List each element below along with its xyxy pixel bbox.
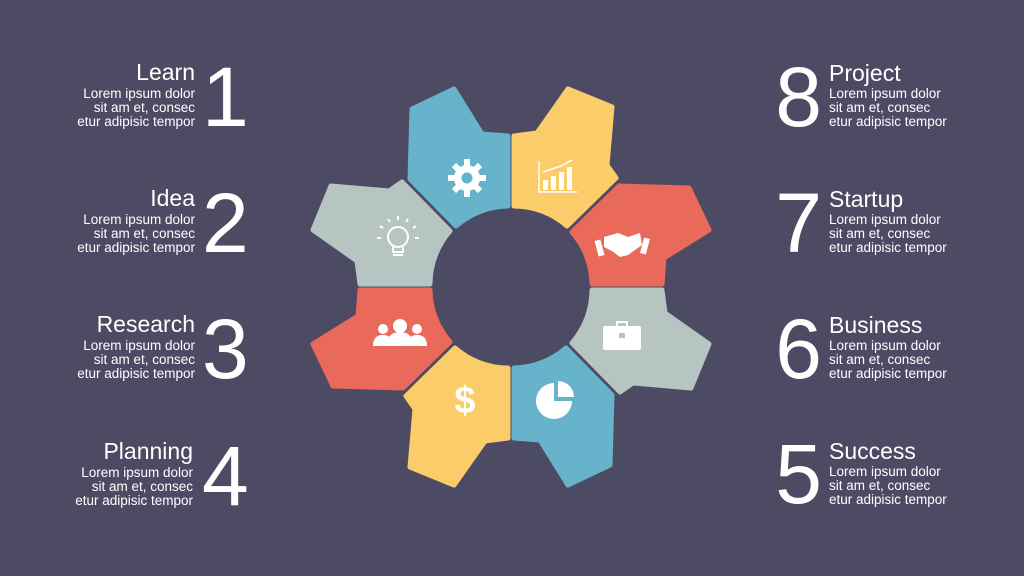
right item 5: Success: Lorem ipsum dolor (829, 464, 941, 479)
icon: light bulb (377, 216, 419, 255)
left item 1: Learn (77, 50, 249, 144)
left item 3: Research (77, 302, 249, 396)
right item 6: Business: Business (829, 312, 922, 338)
left item 3: Research: Research (97, 311, 195, 337)
icon: pie chart (536, 381, 574, 419)
left item 1: Learn: Learn (136, 59, 195, 85)
segment: planning (yellow, dollar) (406, 348, 508, 485)
left item 2: Idea: etur adipisic tempor (77, 240, 195, 255)
right item 7: Startup: etur adipisic tempor (829, 240, 947, 255)
left item 3: Research: sit am et, consec (94, 352, 195, 367)
right item 7: Startup (775, 176, 947, 270)
icon: handshake (595, 233, 650, 257)
right item 6: Business: etur adipisic tempor (829, 366, 947, 381)
segment: startup (red, handshake) (572, 186, 709, 284)
right item 6: Business: Lorem ipsum dolor (829, 338, 941, 353)
left item 1: Learn: etur adipisic tempor (77, 114, 195, 129)
icon: gear (448, 159, 486, 197)
left item 2: Idea: sit am et, consec (94, 226, 195, 241)
right item 8: Project: sit am et, consec (829, 100, 931, 115)
left item 4: Planning: 4 (202, 429, 249, 523)
icon: briefcase (603, 321, 641, 350)
left item 4: Planning: Planning (103, 438, 193, 464)
left item 1: Learn: sit am et, consec (94, 100, 195, 115)
right item 7: Startup: sit am et, consec (829, 226, 931, 241)
segment: success (blue, pie) (514, 348, 612, 485)
cycle diagram (313, 89, 709, 485)
right item 6: Business: 6 (775, 302, 822, 396)
left item 1: Learn: 1 (202, 50, 249, 144)
left item 4: Planning: sit am et, consec (92, 479, 193, 494)
icon: bar chart (539, 160, 577, 192)
segment: business (gray, briefcase) (572, 290, 709, 392)
left item 4: Planning: Lorem ipsum dolor (81, 465, 194, 480)
right item 7: Startup: 7 (775, 176, 822, 270)
icon: dollar: $ (454, 380, 476, 422)
left item 3: Research: Lorem ipsum dolor (83, 338, 196, 353)
right item 8: Project: Lorem ipsum dolor (829, 86, 941, 101)
left item 4: Planning (75, 429, 249, 523)
left item 3: Research: etur adipisic tempor (77, 366, 195, 381)
left item 2: Idea: Idea (150, 185, 195, 211)
segment: project (yellow, chart) (514, 89, 616, 226)
right item 5: Success: sit am et, consec (829, 478, 931, 493)
right item 7: Startup: Startup (829, 186, 903, 212)
right item 8: Project: 8 (775, 50, 822, 144)
right item 5: Success: 5 (775, 427, 822, 521)
right item 8: Project: etur adipisic tempor (829, 114, 947, 129)
icon: people (373, 319, 427, 346)
left item 1: Learn: Lorem ipsum dolor (83, 86, 196, 101)
left item 2: Idea: 2 (202, 176, 249, 270)
right item 6: Business: sit am et, consec (829, 352, 931, 367)
right item 8: Project (775, 50, 947, 144)
left item 4: Planning: etur adipisic tempor (75, 493, 193, 508)
right item 6: Business (775, 302, 947, 396)
left item 2: Idea (77, 176, 249, 270)
right item 5: Success: etur adipisic tempor (829, 492, 947, 507)
right item 5: Success: Success (829, 438, 916, 464)
right item 5: Success (775, 427, 947, 521)
segment: research (red, people) (313, 290, 450, 388)
segment: learn (blue, gear) (410, 89, 508, 226)
left item 2: Idea: Lorem ipsum dolor (83, 212, 196, 227)
segment: idea (gray, bulb) (313, 182, 450, 284)
left item 3: Research: 3 (202, 302, 249, 396)
right item 8: Project: Project (829, 60, 901, 86)
right item 7: Startup: Lorem ipsum dolor (829, 212, 941, 227)
